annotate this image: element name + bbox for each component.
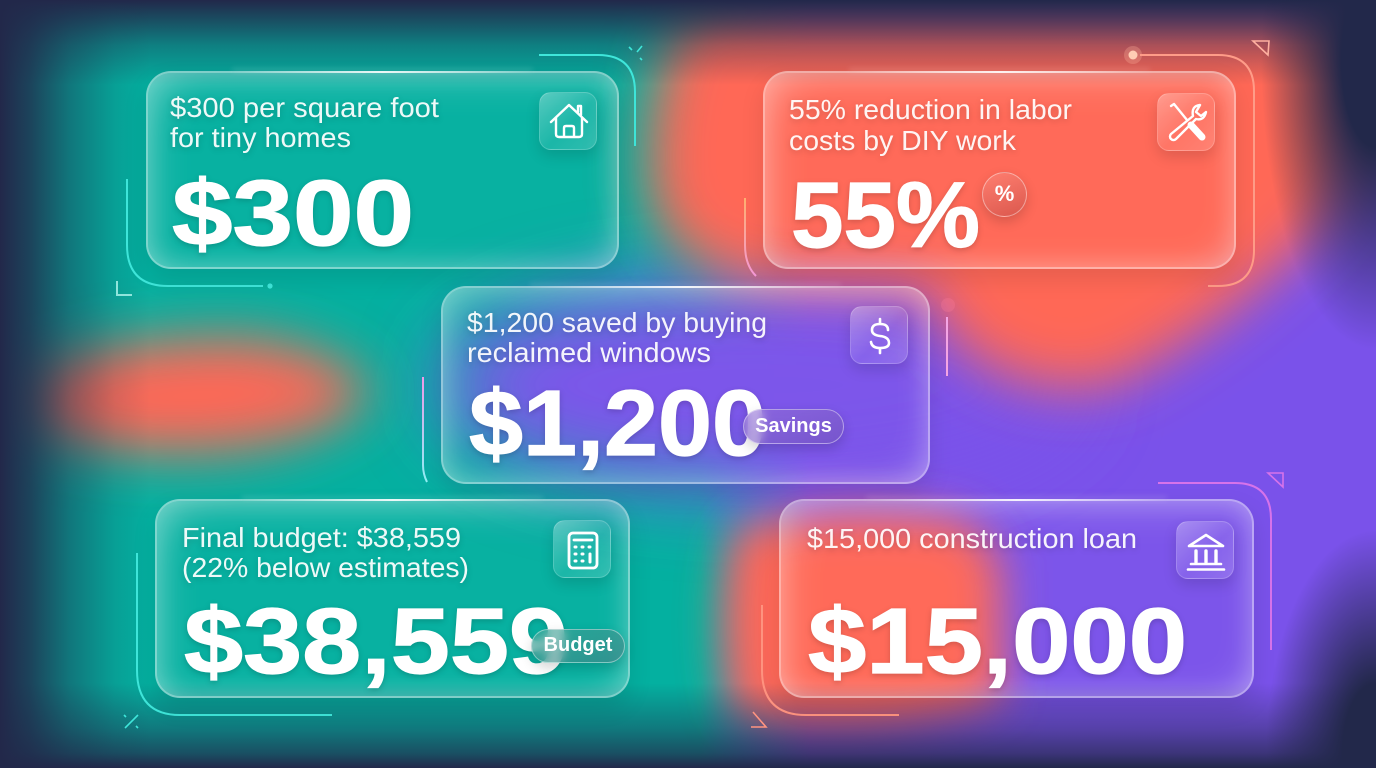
- decorative teal bracket: [124, 553, 332, 728]
- glass card: [155, 499, 630, 698]
- card text: $300 per square foot: [170, 92, 439, 123]
- icon: tools: [1157, 93, 1215, 151]
- decorative purple and salmon brackets: [751, 472, 1284, 728]
- card text: $15,000: [808, 589, 1187, 693]
- card text: [467, 307, 768, 475]
- panel: construction loan: [751, 472, 1284, 728]
- card text: [170, 92, 439, 265]
- card text: (22% below estimates): [182, 552, 469, 583]
- card text: $300: [172, 161, 414, 265]
- card text: reclaimed windows: [467, 337, 711, 368]
- panel: final budget: [124, 494, 634, 728]
- card text: Final budget: $38,559: [182, 522, 461, 553]
- glass card: [763, 71, 1236, 269]
- tag: Budget: Budget: [544, 634, 612, 656]
- card text: $1,200: [469, 371, 766, 475]
- card text: 55%: [791, 163, 980, 267]
- glass card: [146, 71, 619, 269]
- icon: calculator: [553, 520, 611, 578]
- icon: house: [539, 92, 597, 150]
- decorative coral brackets: [744, 40, 1270, 287]
- panel: $300 per square foot: [116, 46, 642, 296]
- panel: 55% reduction in labor costs: [158, 40, 1272, 720]
- card text: costs by DIY work: [789, 125, 1016, 156]
- card text: $1,200 saved by buying: [467, 307, 767, 338]
- card text: $38,559: [184, 589, 568, 693]
- decorative teal brackets: [116, 46, 642, 296]
- glass card: [779, 499, 1254, 698]
- card text: [182, 522, 571, 693]
- icon: bank: [1176, 521, 1234, 579]
- card text: for tiny homes: [170, 122, 351, 153]
- icon: dollar sign: [850, 306, 908, 364]
- glass card: [441, 286, 930, 484]
- panel: $1,200 saved: [158, 282, 1272, 720]
- tag: Budget: [531, 629, 625, 663]
- badge: percent: [982, 172, 1027, 217]
- card text: [807, 523, 1187, 693]
- tag: Savings: [743, 409, 844, 444]
- tag: Savings: Savings: [755, 415, 832, 437]
- card text: [788, 94, 1072, 267]
- badge: percent: %: [995, 181, 1014, 206]
- decorative pink and cyan lines: [422, 298, 954, 482]
- card text: 55% reduction in labor: [789, 94, 1072, 125]
- card text: $15,000 construction loan: [807, 523, 1137, 554]
